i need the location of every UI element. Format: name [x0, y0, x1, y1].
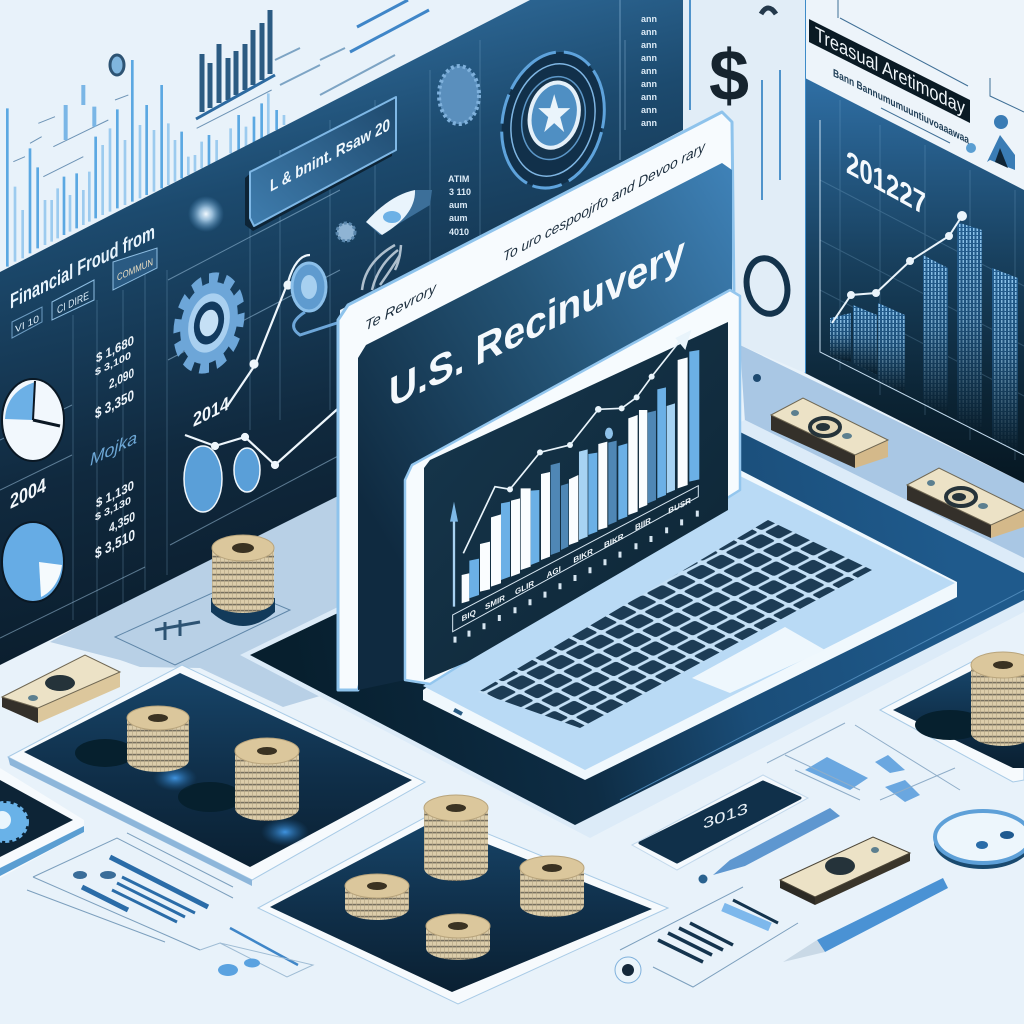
icon: pen lower	[783, 878, 948, 962]
laptop port	[453, 708, 463, 716]
coin stack: back left	[211, 535, 275, 626]
pie chart upper	[2, 379, 64, 461]
icon: star emblem	[488, 41, 618, 199]
small label box 1: COMMUN	[117, 257, 153, 284]
axis labels: BIIR	[635, 515, 651, 533]
icon: gear	[177, 270, 241, 376]
axis labels: GLIR	[515, 578, 534, 597]
striped bar chart	[830, 222, 1018, 451]
numbers lower column: 4,350	[109, 509, 135, 536]
small pies	[184, 446, 260, 512]
axis labels: BIQ	[462, 607, 476, 624]
laptop screen	[405, 290, 740, 684]
icon: small hook	[761, 8, 776, 14]
tray glow 2	[261, 818, 309, 846]
tray shadow right	[915, 710, 985, 740]
small data column: ann	[641, 66, 657, 76]
coin stack: small right	[520, 856, 584, 917]
small label box 2: CI DIRE	[57, 289, 89, 317]
icon: wing emblem	[362, 245, 401, 290]
small data column: ann	[641, 40, 657, 50]
keyboard	[478, 520, 872, 728]
laptop	[405, 290, 957, 780]
coin stack: small left	[345, 874, 409, 920]
coin stack: small bottom	[426, 914, 490, 960]
small data column: ann	[641, 118, 657, 128]
icon: floor dot	[753, 374, 761, 382]
numbers lower column: $ 3,130	[95, 494, 131, 524]
rounded banner	[245, 97, 396, 231]
y axis arrow	[450, 502, 458, 607]
coin stack: tray left 1	[127, 706, 189, 772]
folder caption left: Te Revrory	[365, 279, 437, 335]
panel: right wall	[805, 0, 1024, 483]
line chart	[185, 255, 342, 468]
coin stack: tray left 2	[235, 738, 299, 821]
black title label: Treasual Aretimoday	[815, 23, 965, 120]
pie chart lower	[2, 522, 64, 602]
icon: textured blob	[439, 66, 479, 124]
mini chart: bottom centre	[200, 928, 313, 977]
icon: pen middle	[698, 808, 840, 884]
pale strip behind platform	[240, 420, 1024, 838]
coin stack: tall	[424, 795, 488, 881]
column between walls	[683, 0, 805, 382]
small data column: ann	[641, 92, 657, 102]
tray shadow 1	[75, 739, 135, 767]
panel: center platform	[250, 432, 1024, 825]
numbers upper column: 2,090	[109, 365, 134, 392]
numbers upper column: $ 1,680	[96, 333, 134, 366]
script label: Mojka	[90, 427, 137, 470]
heading: financial: Financial Froud from	[10, 219, 155, 314]
small data column: ann	[641, 79, 657, 89]
panel: folder	[338, 112, 734, 690]
axis labels	[453, 486, 698, 643]
folder caption right: To uro cespoojrfo and Devoo rary	[503, 138, 706, 266]
axis labels: BIKR	[604, 531, 623, 550]
numbers lower column	[95, 478, 135, 563]
icon: dollar sign: $	[709, 36, 749, 116]
outline card with small icon	[115, 585, 290, 665]
main title: U.S. Recinuvery	[389, 227, 685, 417]
dark label pill: 3013	[703, 800, 748, 833]
trend lines top	[275, 0, 429, 95]
year label 2014: 2014	[193, 393, 230, 432]
numbers upper column: $ 3,100	[95, 349, 131, 379]
small data column	[448, 14, 657, 237]
icon: ring badge	[110, 55, 124, 75]
icon: magnifier lens	[934, 811, 1024, 869]
small data column: aum	[449, 213, 468, 223]
numbers lower column: $ 1,130	[96, 478, 134, 511]
tray shadow 2	[178, 782, 242, 812]
small data column: ann	[641, 105, 657, 115]
icon: ring	[742, 254, 792, 318]
icon: headset badge	[292, 263, 340, 335]
coin stack: right	[971, 652, 1024, 746]
small label box 3	[12, 307, 42, 338]
dark label pill	[632, 775, 808, 870]
axis labels: SMIR	[485, 592, 505, 612]
axis labels: BUSR	[668, 495, 691, 516]
panel: left wall	[0, 0, 683, 665]
numbers upper column	[95, 333, 134, 423]
banknote: lower right	[780, 837, 910, 905]
line on right chart	[832, 212, 966, 323]
icon: person	[966, 115, 1015, 170]
banknote: right edge	[907, 468, 1024, 538]
panel: coin tray bottom	[258, 812, 668, 1004]
icon: small cog	[337, 223, 355, 241]
year label: 201227	[846, 144, 926, 223]
year label 2004: 2004	[10, 474, 46, 514]
small data column: ann	[641, 27, 657, 37]
panel: coin tray right	[880, 660, 1024, 782]
mini chart: bottom middle	[620, 887, 798, 987]
small label box 1	[113, 248, 157, 290]
laptop base	[423, 470, 957, 780]
axis labels: AGI	[547, 564, 561, 580]
axis labels: BIKR	[573, 546, 593, 565]
numbers lower column: $ 3,510	[95, 527, 135, 563]
floor band right	[740, 345, 1024, 560]
trackpad	[692, 627, 825, 693]
subtitle: Bann Bannumumuuntiuvoaaawaa	[833, 67, 969, 147]
small data column: ann	[641, 14, 657, 24]
rounded banner: L & bnint. Rsaw 20	[270, 115, 390, 196]
banknote: upper right	[771, 398, 888, 468]
icon: blue gear fragment	[0, 803, 27, 841]
numbers upper column: $ 3,350	[95, 387, 134, 423]
thin bar chart above left wall	[7, 60, 284, 267]
panel: coin tray left	[8, 665, 425, 886]
icon: eye dot bottom	[615, 957, 641, 983]
banknote: left	[2, 655, 120, 723]
mini chart: right	[767, 723, 960, 802]
small data column: ann	[641, 53, 657, 63]
dark mini bar chart top	[196, 10, 275, 119]
tray glow 1	[153, 765, 197, 791]
small data column: aum	[449, 200, 468, 210]
trend arrow on screen	[463, 332, 690, 553]
platform inner line	[620, 590, 1024, 800]
small label box 2	[52, 280, 94, 320]
small data column: 3 110	[449, 187, 471, 197]
small data column: ATIM	[448, 174, 469, 184]
bar chart on screen	[462, 350, 699, 603]
panel: tray corner left	[0, 768, 84, 878]
floor band left	[50, 480, 340, 707]
mini chart: bottom left	[27, 833, 233, 950]
small label box 3: VI 10	[15, 313, 39, 336]
icon: eye	[366, 190, 432, 235]
icon: sun glow	[188, 196, 224, 232]
small data column: 4010	[449, 227, 469, 237]
